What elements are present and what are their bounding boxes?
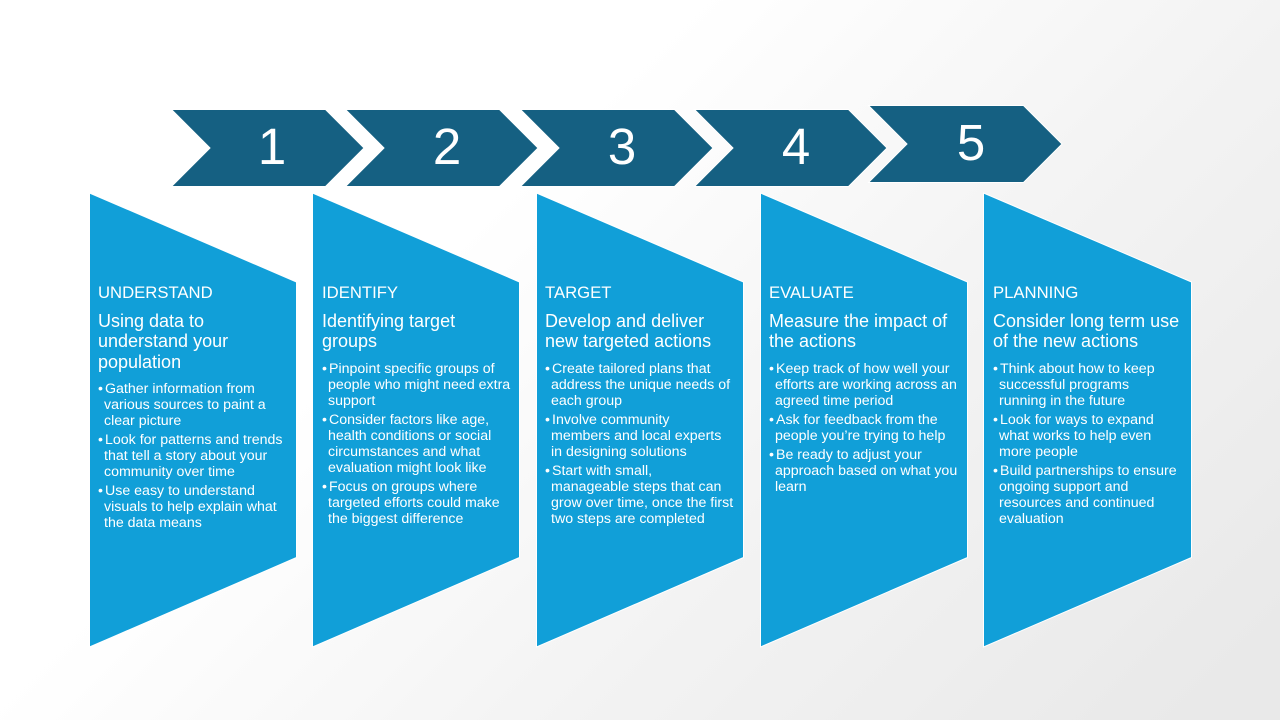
bullets: understand: Look for patterns and trends	[105, 432, 282, 448]
bullets: understand: Use easy to understand	[105, 483, 255, 499]
bullets: evaluate: approach based on what you	[775, 463, 957, 479]
panel: identify	[312, 193, 520, 647]
subheading: understand: population	[98, 352, 181, 372]
heading: target: TARGET	[545, 283, 611, 302]
bullets: understand: •	[98, 432, 103, 448]
bullets: evaluate: people you’re trying to help	[775, 428, 945, 444]
chevron 3	[520, 110, 713, 186]
bullets: identify: Focus on groups where	[329, 479, 477, 495]
bullets: planning: •	[993, 412, 998, 428]
subheading: identify: Identifying target	[322, 311, 455, 331]
bullets: identify: •	[322, 479, 327, 495]
panel: target	[536, 193, 744, 647]
heading: identify: IDENTIFY	[322, 283, 398, 302]
bullets: evaluate: •	[769, 412, 774, 428]
subheading: planning: Consider long term use	[993, 311, 1179, 331]
bullets: target: •	[545, 412, 550, 428]
bullets: evaluate: Keep track of how well your	[776, 361, 950, 377]
subheading: target: Develop and deliver	[545, 311, 704, 331]
subheading: evaluate: the actions	[769, 331, 856, 351]
bullets: identify: the biggest difference	[328, 511, 464, 527]
chevron 1	[172, 110, 364, 186]
subheading: understand: Using data to	[98, 311, 204, 331]
chevron 4: 4	[782, 118, 810, 175]
bullets: target: two steps are completed	[551, 511, 705, 527]
bullets: evaluate: •	[769, 361, 774, 377]
bullets: evaluate: efforts are working across an	[775, 377, 957, 393]
bullets: target: address the unique needs of	[551, 377, 730, 393]
chevron 2: 2	[433, 118, 461, 175]
subheading: identify: groups	[322, 331, 377, 351]
chevron 2	[346, 110, 538, 186]
panel: evaluate	[760, 193, 968, 647]
bullets: planning: •	[993, 463, 998, 479]
bullets: target: Involve community	[552, 412, 670, 428]
bullets: planning: what works to help even	[998, 428, 1151, 444]
panel: understand	[90, 193, 296, 647]
bullets: identify: targeted efforts could make	[328, 495, 500, 511]
bullets: identify: support	[328, 393, 375, 409]
bullets: planning: evaluation	[999, 511, 1064, 527]
bullets: understand: •	[98, 381, 103, 397]
bullets: understand: clear picture	[104, 413, 181, 429]
bullets: understand: various sources to paint a	[104, 397, 266, 413]
bullets: planning: Build partnerships to ensure	[1000, 463, 1177, 479]
chevron 5: 5	[957, 114, 985, 171]
bullets: identify: Pinpoint specific groups of	[329, 361, 495, 377]
bullets: identify: health conditions or social	[328, 428, 491, 444]
bullets: identify: evaluation might look like	[328, 460, 487, 476]
bullets: planning: Think about how to keep	[1000, 361, 1155, 377]
bullets: planning: Look for ways to expand	[1000, 412, 1154, 428]
bullets: planning: running in the future	[999, 393, 1125, 409]
bullets: planning: •	[993, 361, 998, 377]
subheading: planning: of the new actions	[993, 331, 1138, 351]
heading: evaluate: EVALUATE	[769, 283, 854, 302]
bullets: target: •	[545, 463, 550, 479]
bullets: identify: •	[322, 412, 327, 428]
subheading: target: new targeted actions	[545, 331, 711, 351]
bullets: understand: community over time	[104, 464, 235, 480]
subheading: understand: understand your	[98, 331, 228, 351]
bullets: evaluate: Ask for feedback from the	[776, 412, 938, 428]
chevron 5	[868, 106, 1062, 182]
subheading: evaluate: Measure the impact of	[769, 311, 948, 331]
chevron 4	[694, 110, 887, 186]
bullets: target: in designing solutions	[551, 444, 687, 460]
bullets: identify: •	[322, 361, 327, 377]
bullets: understand: that tell a story about your	[104, 448, 268, 464]
bullets: evaluate: •	[769, 447, 774, 463]
bullets: target: Start with small,	[552, 463, 652, 479]
heading: understand: UNDERSTAND	[98, 283, 213, 302]
bullets: identify: Consider factors like age,	[329, 412, 489, 428]
bullets: target: grow over time, once the first	[551, 495, 733, 511]
chevron 3: 3	[608, 118, 636, 175]
bullets: identify: people who might need extra	[328, 377, 510, 393]
chevron 1: 1	[258, 118, 286, 175]
bullets: planning: ongoing support and	[999, 479, 1128, 495]
bullets: target: members and local experts	[551, 428, 721, 444]
bullets: target: Create tailored plans that	[552, 361, 711, 377]
bullets: evaluate: Be ready to adjust your	[776, 447, 922, 463]
bullets: evaluate: agreed time period	[775, 393, 893, 409]
bullets: identify: circumstances and what	[328, 444, 480, 460]
bullets: understand: •	[98, 483, 103, 499]
bullets: target: manageable steps that can	[551, 479, 721, 495]
bullets: planning: more people	[999, 444, 1078, 460]
bullets: understand: the data means	[104, 515, 202, 531]
panel: planning	[984, 193, 1192, 647]
bullets: understand: Gather information from	[105, 381, 255, 397]
heading: planning: PLANNING	[993, 283, 1078, 302]
bullets: evaluate: learn	[775, 479, 807, 495]
bullets: planning: resources and continued	[999, 495, 1154, 511]
bullets: planning: successful programs	[999, 377, 1129, 393]
bullets: target: •	[545, 361, 550, 377]
bullets: target: each group	[551, 393, 622, 409]
bullets: understand: visuals to help explain what	[104, 499, 277, 515]
